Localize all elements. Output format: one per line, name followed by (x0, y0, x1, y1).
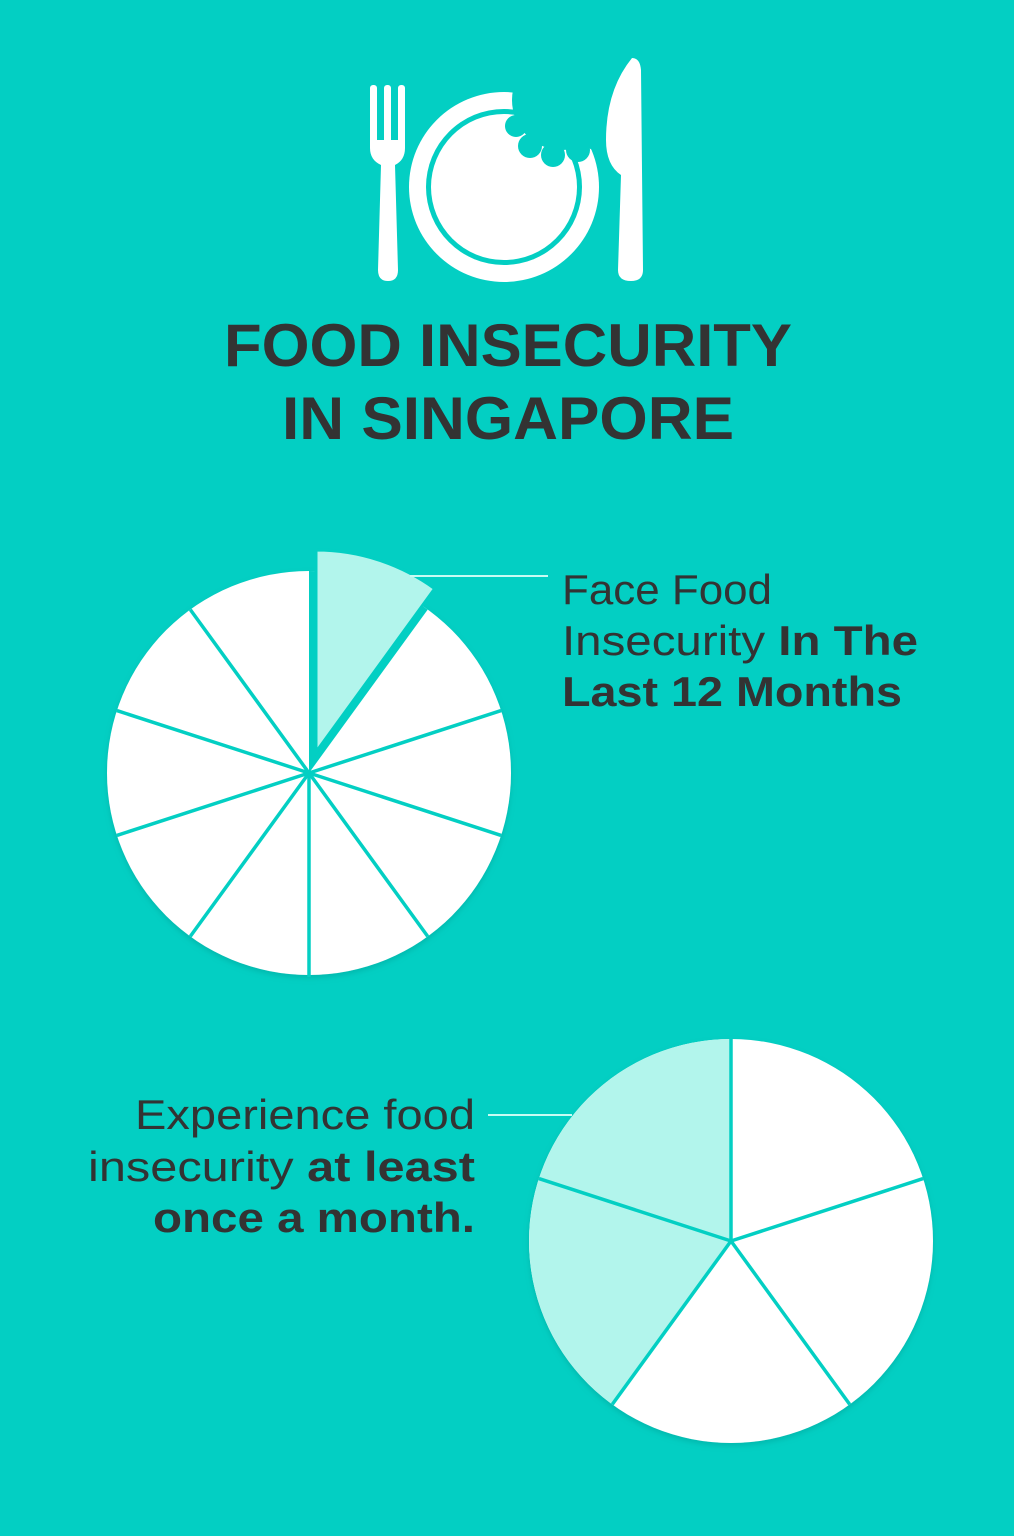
icon: knife (606, 58, 643, 281)
title (224, 312, 792, 452)
highlighted slices (529, 1039, 731, 1404)
text block 1: Last 12 Months (562, 668, 902, 715)
text block 2: once a month. (153, 1194, 475, 1241)
text block 2: Experience food (135, 1091, 475, 1138)
leader line 1 (410, 575, 548, 577)
leader line 2 (488, 1114, 572, 1116)
title: FOOD INSECURITY (224, 312, 792, 379)
icon: fork (370, 85, 405, 281)
icon: plate (409, 92, 599, 282)
icon: fork, plate and knife (370, 58, 643, 282)
text block 1 (562, 566, 918, 715)
title: IN SINGAPORE (282, 385, 734, 452)
text block 2: insecurity at least (88, 1143, 475, 1190)
highlighted slice (316, 550, 435, 752)
text block 1: Face Food (562, 566, 772, 613)
pie chart: 1 in 10 (107, 550, 511, 977)
text block 1: Insecurity In The (562, 617, 918, 664)
pie chart: 2 in 5 (529, 1037, 933, 1443)
text block 2 (88, 1091, 475, 1241)
